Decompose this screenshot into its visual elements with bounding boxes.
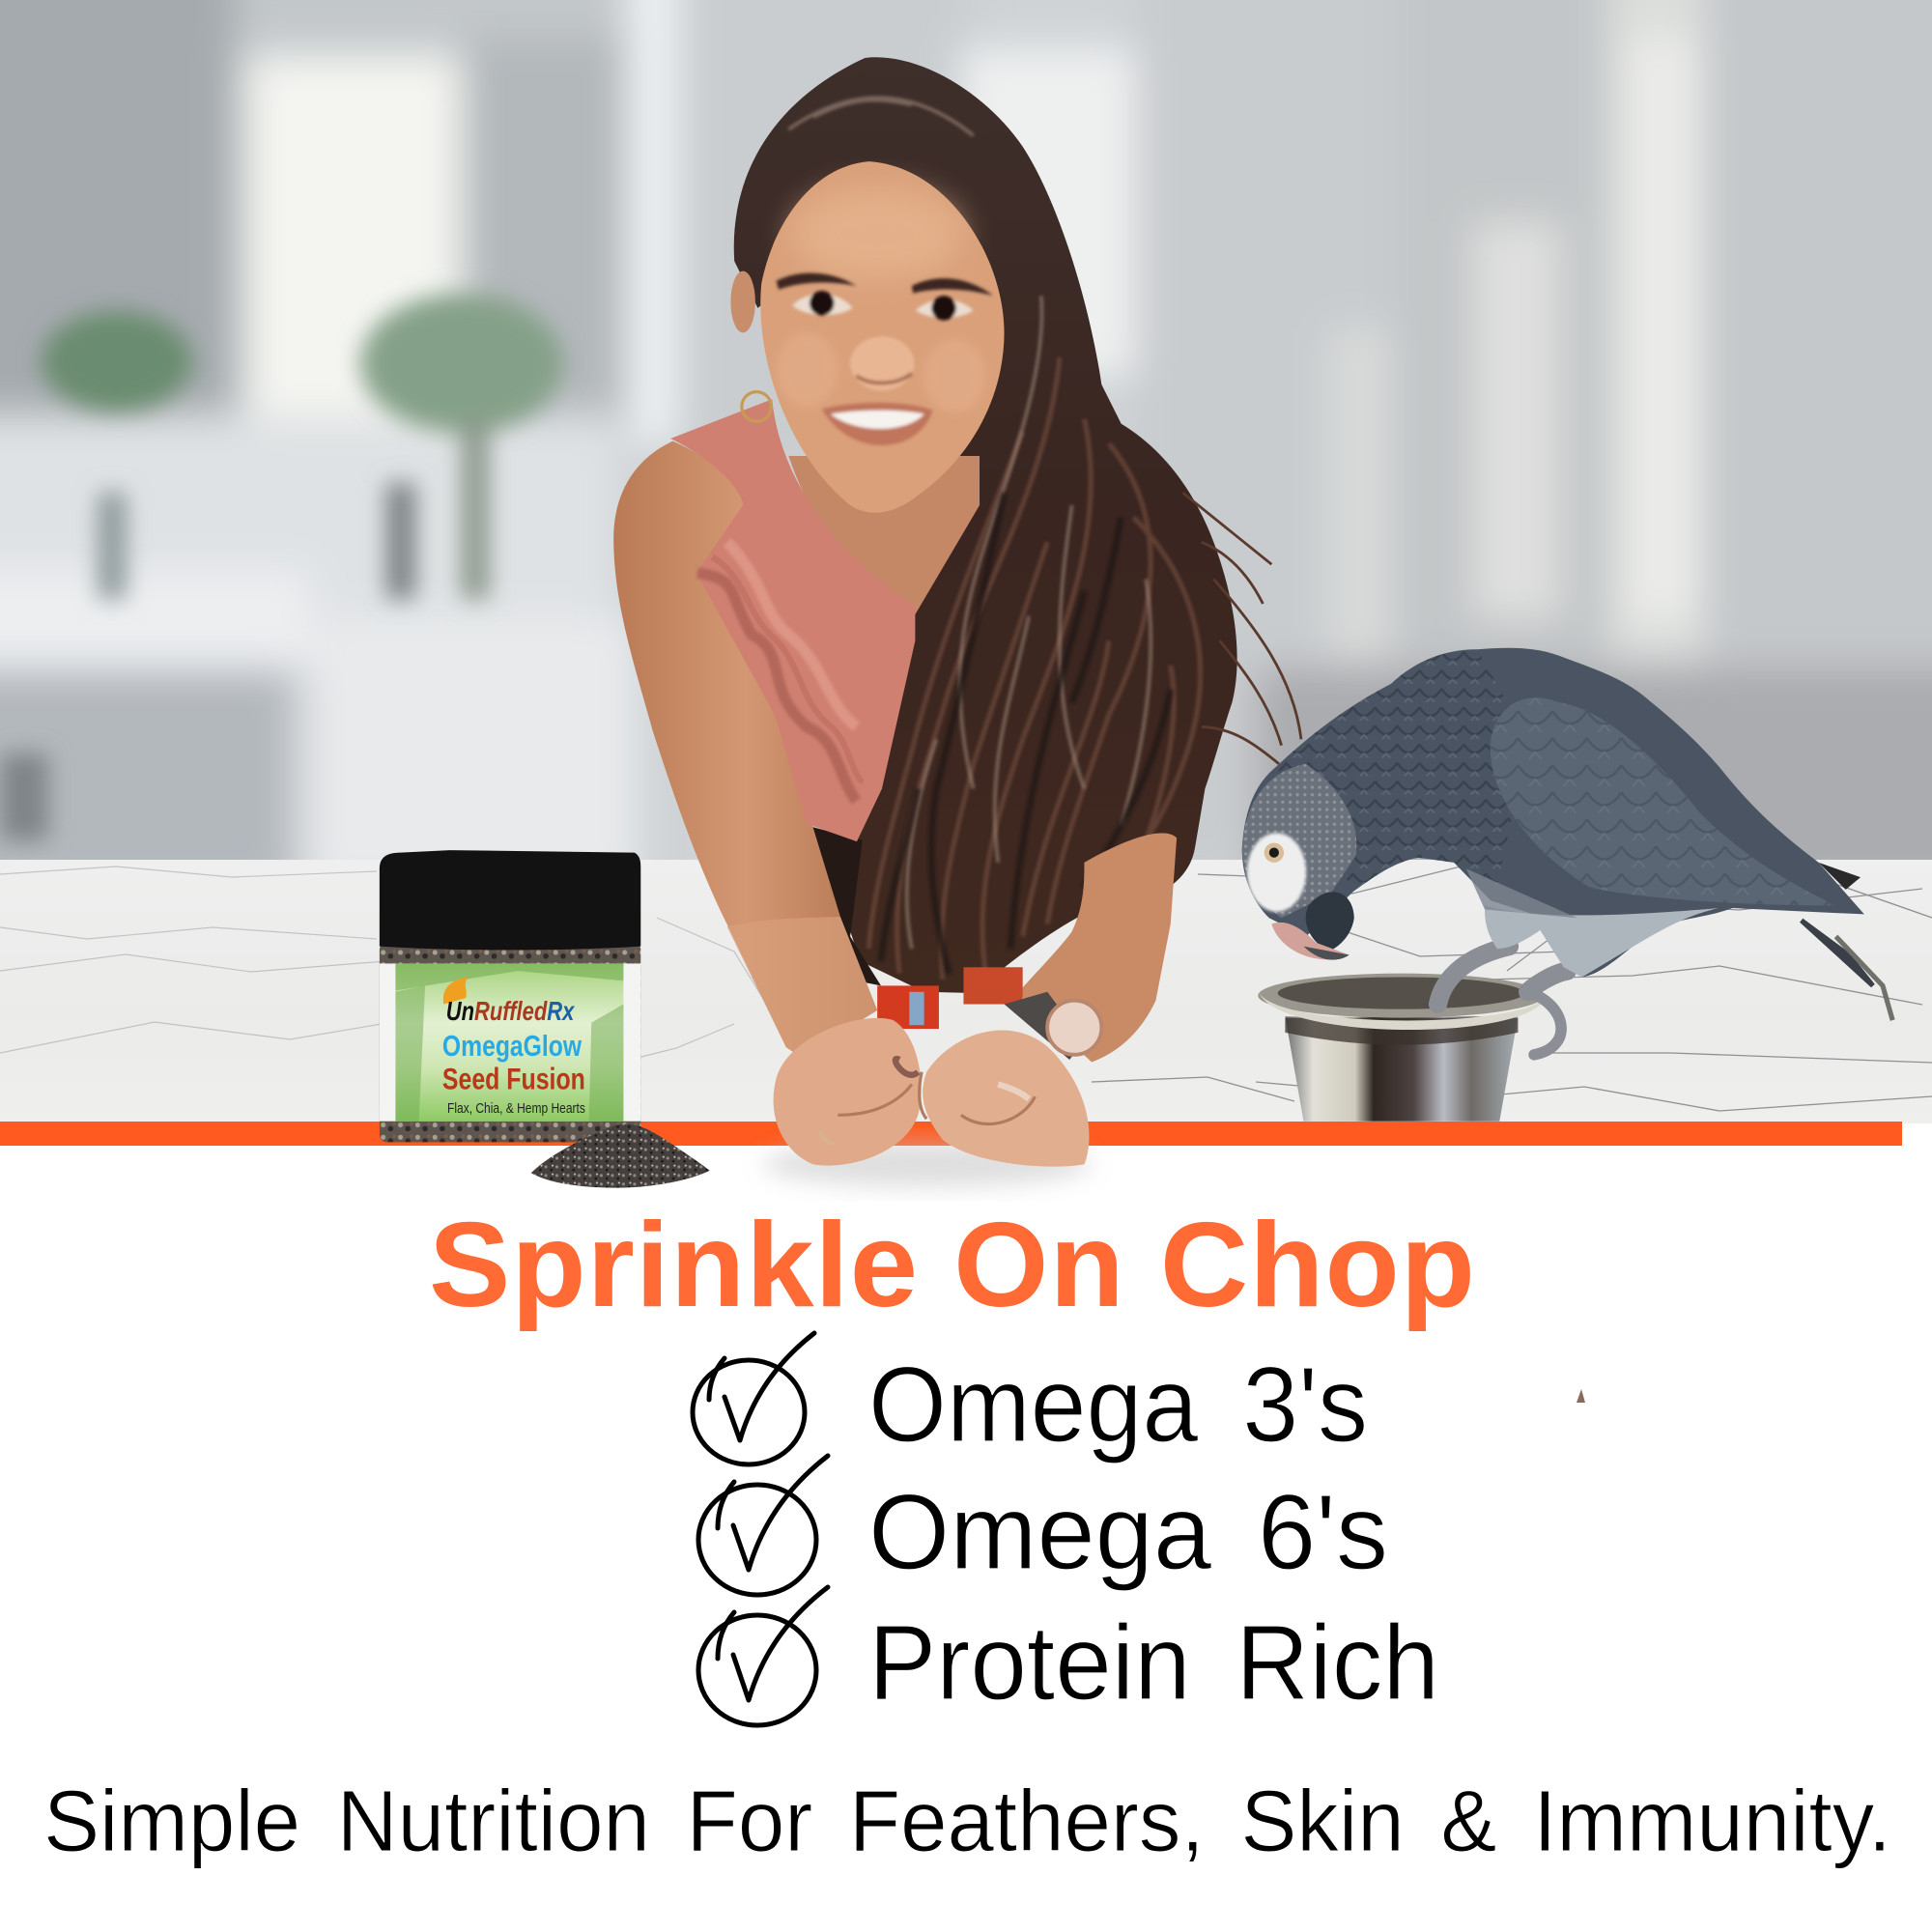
marble counter bbox=[0, 860, 1932, 1123]
parrot feet bbox=[1438, 947, 1567, 1005]
item: omega 3 bbox=[693, 1333, 1368, 1464]
forearm highlight bbox=[727, 917, 877, 1057]
hair wisps bbox=[1182, 493, 1301, 764]
checklist bbox=[693, 1333, 1439, 1725]
product jar bbox=[380, 850, 710, 1188]
parrot body bbox=[1242, 648, 1864, 977]
eyebrows bbox=[777, 273, 856, 290]
right hand bbox=[923, 1030, 1089, 1167]
cup bbox=[1258, 974, 1545, 1122]
item: protein bbox=[698, 1587, 1439, 1725]
soft shadow under hands bbox=[763, 1141, 1092, 1187]
seed contents bbox=[380, 943, 640, 1142]
left arm bbox=[613, 441, 877, 1057]
chia seed pile bbox=[531, 1123, 710, 1188]
face bbox=[730, 161, 1005, 513]
left hand bbox=[774, 1018, 922, 1166]
item: omega 6: Omega 6's bbox=[868, 1473, 1388, 1592]
brand name: UnRuffledRx bbox=[446, 996, 575, 1026]
eye bbox=[1264, 842, 1284, 863]
neck bbox=[788, 456, 980, 616]
mouth bbox=[822, 403, 933, 445]
parrot and cup bbox=[1242, 648, 1892, 1122]
orange bar bbox=[0, 1122, 1902, 1146]
item: protein: Protein Rich bbox=[868, 1604, 1439, 1722]
product name: OmegaGlow bbox=[442, 1030, 582, 1063]
parrot head bbox=[1242, 764, 1356, 918]
small brown speck bbox=[1577, 1389, 1585, 1403]
white eye patch bbox=[1247, 833, 1306, 912]
beak bbox=[1271, 892, 1354, 960]
pink top bbox=[672, 401, 914, 840]
parrot tail bbox=[1802, 863, 1892, 1020]
item: omega 3: Omega 3's bbox=[868, 1346, 1368, 1464]
clothing strip bbox=[877, 967, 1023, 1029]
product subtitle: Seed Fusion bbox=[442, 1062, 585, 1096]
eyes bbox=[792, 294, 853, 315]
fingers bbox=[819, 1059, 1035, 1144]
woman illustration bbox=[613, 57, 1301, 1167]
title: Sprinkle On Chop bbox=[429, 1199, 1476, 1332]
item: omega 6 bbox=[698, 1456, 1388, 1595]
nose bbox=[850, 336, 914, 390]
logo flame bbox=[443, 977, 469, 1005]
earring bbox=[742, 392, 771, 421]
tagline: Simple Nutrition For Feathers, Skin & Immunity. bbox=[43, 1774, 1891, 1870]
blurred room background bbox=[0, 0, 1932, 889]
hair back bbox=[734, 57, 1301, 993]
watch bbox=[1005, 992, 1101, 1060]
right arm bbox=[1018, 833, 1177, 1062]
parrot belly bbox=[1485, 905, 1719, 977]
parrot wing bbox=[1491, 697, 1836, 905]
dark pants bbox=[807, 826, 881, 985]
ingredients: Flax, Chia, & Hemp Hearts bbox=[447, 1101, 585, 1117]
jar label bbox=[380, 963, 640, 1122]
jar cap bbox=[380, 850, 640, 950]
